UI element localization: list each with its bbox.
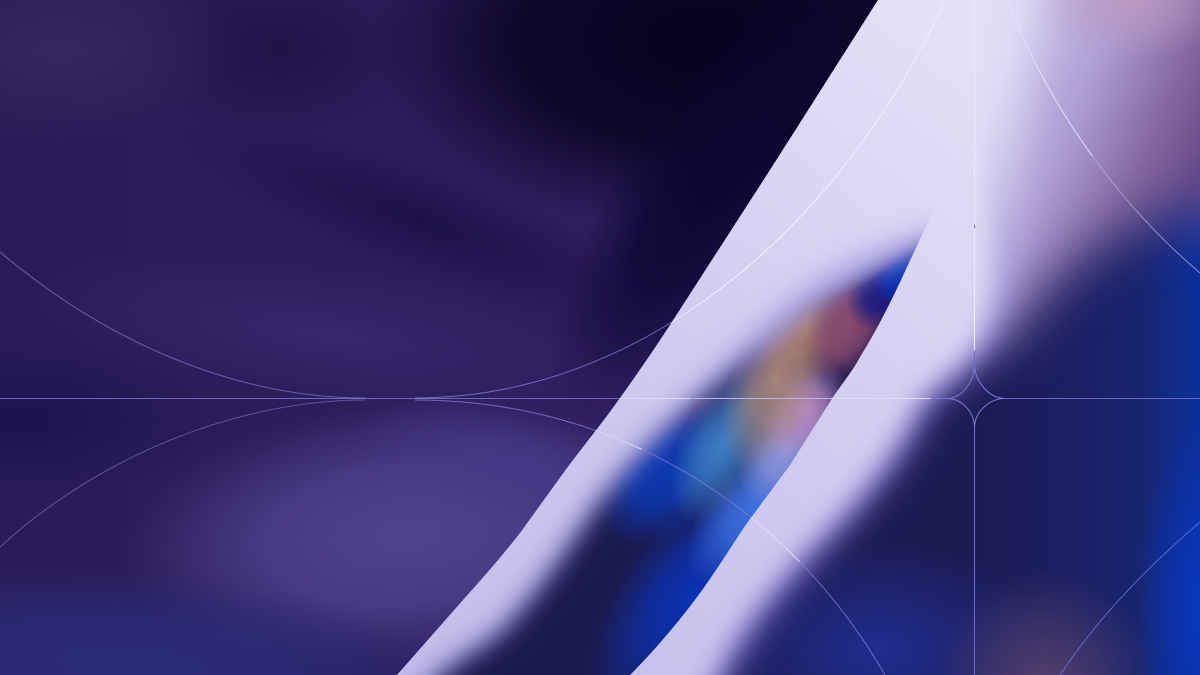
bright line segments over the blade <box>595 0 1092 562</box>
bright lilac blade body <box>397 0 1042 675</box>
upper-right violet glow <box>965 0 1200 383</box>
inner recess with iridescent glow <box>407 218 930 675</box>
star junction <box>947 365 1005 428</box>
violet fringe of the blade <box>397 0 1015 675</box>
horizontal line <box>0 398 1200 400</box>
right dark and blue field <box>397 0 1200 675</box>
pale line across the recess <box>693 398 833 400</box>
upper middle arc <box>415 0 945 398</box>
upper left arc <box>0 252 365 398</box>
lower middle arc <box>415 400 885 675</box>
lower right arc <box>1060 522 1200 675</box>
violet fringe of the recess <box>414 218 930 675</box>
lower left arc <box>0 400 365 547</box>
upper right arc <box>1007 0 1200 273</box>
vertical line <box>974 0 976 675</box>
